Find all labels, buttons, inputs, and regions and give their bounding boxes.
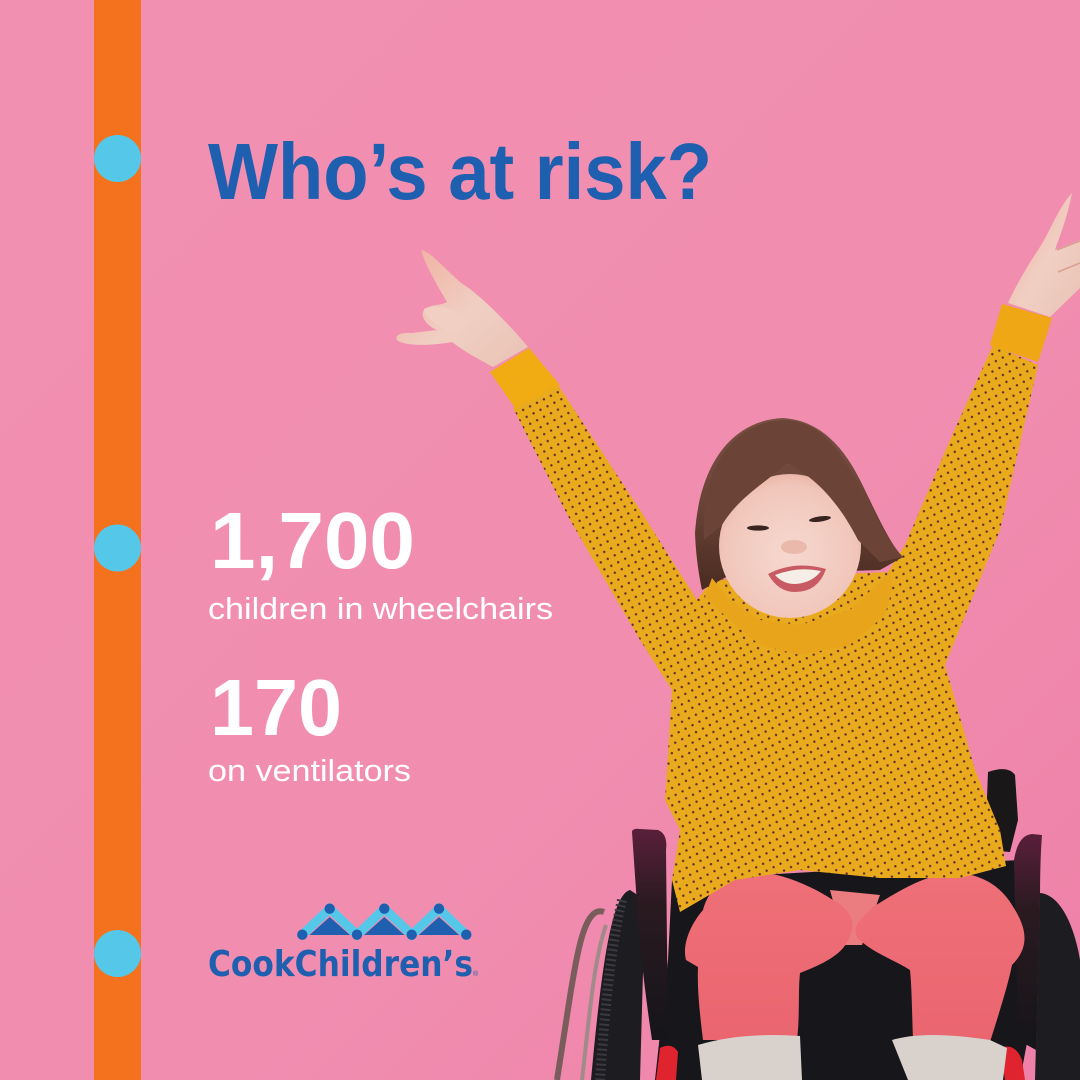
orange vertical timeline bar with nodes	[94, 0, 141, 1080]
face	[719, 474, 861, 618]
frame behind legs	[655, 860, 1035, 1080]
stat: 170 on ventilators: 170	[210, 663, 342, 752]
stat: 170 on ventilators	[208, 663, 411, 788]
ruffled collar	[705, 572, 892, 655]
backrest	[985, 769, 1018, 852]
logo wordmark: CookChildren’s	[208, 944, 473, 985]
tire right	[1035, 893, 1080, 1080]
stat: 1,700 children in wheelchairs	[208, 496, 553, 626]
stat: 170 on ventilators: on ventilators	[208, 753, 411, 788]
registered mark: ®	[473, 970, 479, 978]
leggings	[685, 872, 1025, 1042]
push rim left	[557, 911, 604, 1080]
stat: 1,700 children in wheelchairs: 1,700	[210, 496, 415, 585]
wheelchair	[557, 769, 1080, 1080]
title: Who’s at risk?	[208, 127, 712, 216]
logo mark: three peaks	[297, 904, 471, 940]
photo: smiling girl in wheelchair	[396, 193, 1080, 1080]
fringe	[704, 420, 903, 562]
sleeves and torso	[513, 345, 1038, 912]
red posts	[656, 1046, 678, 1080]
ankle straps	[698, 1035, 1007, 1080]
stat: 1,700 children in wheelchairs: children in wheelchairs	[208, 591, 553, 626]
right hand	[1008, 193, 1080, 317]
mouth	[768, 565, 826, 592]
sweater	[490, 304, 1052, 912]
eyes	[747, 515, 831, 531]
nose	[781, 540, 807, 554]
tire left	[591, 890, 645, 1080]
hair back	[695, 418, 903, 590]
right cuff	[990, 304, 1052, 362]
left hand	[396, 250, 528, 367]
left cuff	[490, 348, 560, 408]
wheel guards	[632, 829, 668, 1040]
Cook Children's logo	[208, 904, 479, 985]
